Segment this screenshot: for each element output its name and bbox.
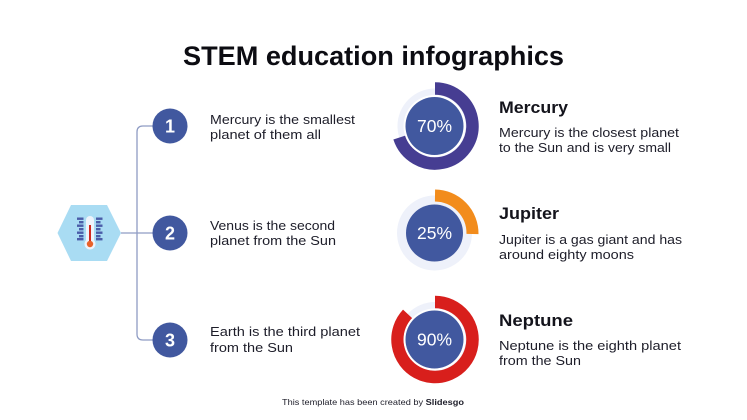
panel: Jupiter text bbox=[499, 204, 682, 262]
text: Mercury fact: planet of them all bbox=[210, 128, 321, 142]
footer credit: This template has been created by Slidesgo bbox=[282, 397, 464, 407]
panel: Jupiter text: Jupiter bbox=[499, 204, 559, 223]
donut chart: 90%: 90% bbox=[417, 330, 452, 350]
text: Venus fact: Venus is the second bbox=[210, 219, 335, 233]
step 2 badge: 2 bbox=[165, 224, 175, 244]
step 2 badge bbox=[152, 216, 188, 250]
text: Mercury fact: Mercury is the smallest bbox=[210, 113, 356, 127]
panel: Mercury text: Mercury bbox=[499, 98, 569, 117]
text: Venus fact: planet from the Sun bbox=[210, 234, 336, 248]
connector lines bbox=[121, 126, 153, 340]
step 1 badge: 1 bbox=[165, 116, 175, 136]
step 3 badge: 3 bbox=[165, 330, 175, 350]
panel: Mercury text: Mercury is the closest planet bbox=[499, 126, 680, 140]
text: Earth fact: from the Sun bbox=[210, 341, 293, 355]
donut chart: 90% bbox=[398, 302, 473, 377]
text: Earth fact: Earth is the third planet bbox=[210, 325, 361, 339]
panel: Neptune text: Neptune bbox=[499, 311, 573, 330]
donut chart: 25% bbox=[397, 196, 473, 270]
panel: Neptune text: Neptune is the eighth planet bbox=[499, 339, 682, 353]
panel: Jupiter text: Jupiter is a gas giant and has bbox=[499, 233, 682, 247]
text: Mercury fact bbox=[210, 113, 356, 142]
icon: thermometer hexagon bbox=[58, 205, 121, 261]
donut chart: 25%: 25% bbox=[417, 223, 452, 243]
panel: Neptune text bbox=[499, 311, 682, 368]
donut chart: 70%: 70% bbox=[417, 116, 452, 136]
panel: Neptune text: from the Sun bbox=[499, 354, 581, 368]
donut chart: 70% bbox=[398, 88, 472, 164]
panel: Jupiter text: around eighty moons bbox=[499, 248, 634, 262]
text: Venus fact bbox=[210, 219, 336, 248]
panel: Mercury text: to the Sun and is very small bbox=[499, 141, 671, 155]
title: STEM education infographics bbox=[183, 41, 564, 71]
step 1 badge bbox=[152, 108, 188, 144]
step 3 badge bbox=[152, 322, 188, 358]
panel: Mercury text bbox=[499, 98, 680, 155]
text: Earth fact bbox=[210, 325, 361, 355]
